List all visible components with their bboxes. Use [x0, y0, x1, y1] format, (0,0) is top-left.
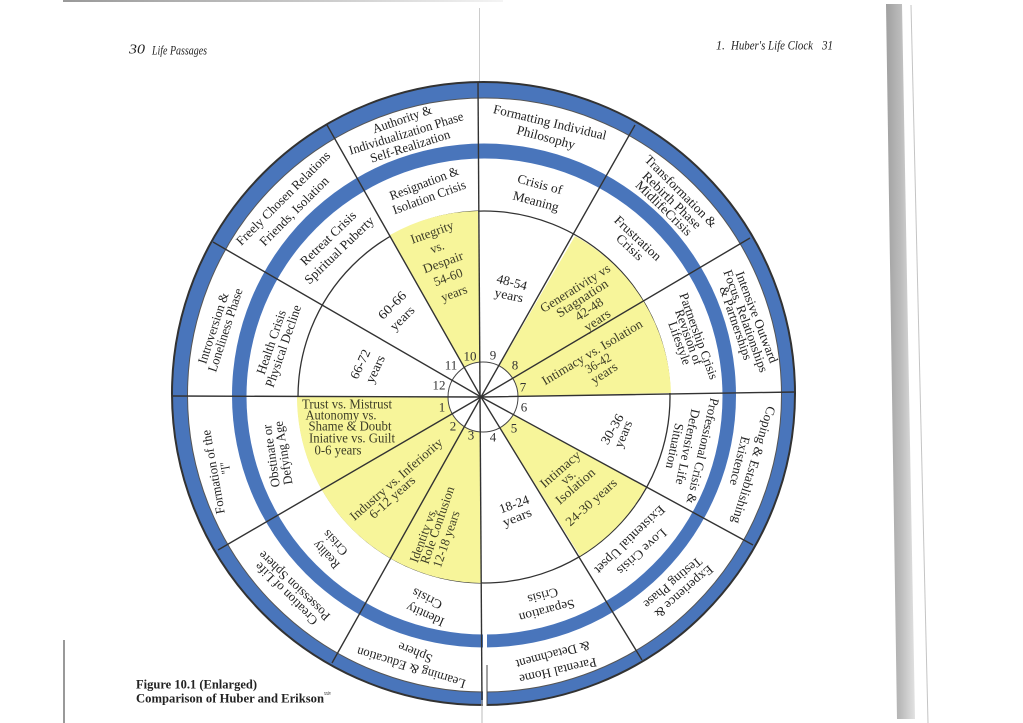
- Erikson label: Generativity vs Stagnation: Generativity vs: [537, 260, 613, 316]
- age label: 48-54 years: [493, 271, 529, 305]
- middle ring label: Professional Crisis: [663, 397, 722, 505]
- outer ring label: Introversion: Introversion &: [194, 290, 232, 366]
- middle ring label: Partnership Crisis: Revision of: [672, 307, 706, 367]
- age label: 18-24 years: 18-24: [497, 491, 532, 516]
- age label: 30-36 years: 30-36: [597, 411, 627, 447]
- age label: 30-36 years: [597, 411, 635, 450]
- middle ring label: Reality Crisis: Reality: [309, 537, 343, 572]
- Erikson label: Generativity vs Stagnation: Stagnation: [553, 275, 611, 320]
- middle ring label: Health Crisis: Physical Decline: [262, 303, 304, 389]
- sector numbers 1 to 12: 5: [511, 420, 517, 436]
- outer ring label: Experience and Testing: Testing Phase: [640, 554, 705, 612]
- Erikson label: Trust, Autonomy, Initiative 0-6 years: Shame & Doubt: [308, 420, 392, 434]
- book gutter line: [478, 8, 480, 82]
- yellow sector: Erikson stages 7 and 8: [481, 236, 671, 397]
- sector numbers 1 to 12: 10: [464, 348, 476, 364]
- middle ring label: Love Crisis: Love Crisis: [614, 526, 670, 578]
- Erikson label: Generativity vs Stagnation: 42-48: [572, 294, 606, 324]
- header: left page: Life Passages: [151, 42, 207, 58]
- middle ring label: Frustration Crisis: Crisis: [613, 231, 647, 263]
- middle ring label: Crisis of Meaning: [511, 171, 565, 214]
- outer ring label: Formatting Individual Philosophy: Philosophy: [515, 122, 577, 152]
- page edge: left scan line: [63, 640, 65, 723]
- chart: Huber and Erikson life clock wheel: [172, 82, 795, 705]
- age label: 66-72 years: [347, 347, 388, 385]
- Erikson label: Intimacy vs. Isolation 24-30: [537, 447, 620, 529]
- middle ring label: Separation Crisis: Separation: [517, 596, 576, 626]
- Erikson label: Integrity vs. Despair: Integrity: [408, 217, 456, 247]
- middle ring label: Professional Crisis: Situation: [663, 422, 687, 471]
- Erikson label: Industry vs. Inferiority: 6-12 years: [366, 472, 418, 522]
- figure caption: xxiv: [324, 691, 331, 697]
- Erikson label: Identity vs. Role Confusion: Role Confusion: [417, 484, 457, 566]
- middle ring label: Resignation: Isolation Crisis: [390, 177, 468, 217]
- Erikson label: Generativity vs Stagnation: years: [581, 306, 613, 334]
- figure caption: [136, 676, 331, 706]
- middle ring label: Identity Crisis: [403, 585, 446, 630]
- outer ring label: Transformation: Rebirth Phase: [639, 168, 705, 232]
- middle ring label: Frustration Crisis: Frustration: [611, 212, 665, 264]
- outer ring label: Creation of Life: Possession Sphere: [255, 548, 333, 624]
- middle ring label: Health Crisis: Health Crisis: [253, 308, 289, 376]
- Erikson label: Intimacy vs. Isolation 36-42: Intimacy vs. Isolation: [539, 316, 646, 388]
- middle ring label: Partnership Crisis: Partnership Crisis: [676, 291, 722, 381]
- outer white ring: Huber phases: [188, 98, 782, 692]
- age label: 60-66 years: years: [386, 302, 418, 334]
- age label: 48-54 years: 48-54: [495, 271, 529, 293]
- Erikson label: Trust, Autonomy, Initiative 0-6 years: [302, 398, 395, 458]
- sector numbers 1 to 12: 1: [439, 400, 445, 414]
- outer ring label: Learning and Education: Learning & Education: [354, 644, 467, 692]
- age label: 30-36 years: years: [611, 418, 635, 450]
- sector numbers 1 to 12: 3: [468, 428, 474, 442]
- header: right page: 31: [821, 38, 833, 52]
- middle ring label: Professional Crisis: Professional Crisis &: [684, 397, 722, 505]
- Erikson label: Integrity vs. Despair: 54-60: [431, 265, 465, 289]
- sector numbers 1 to 12: 7: [520, 380, 527, 394]
- outer ring label: Introversion: Loneliness Phase: [204, 286, 246, 374]
- middle white ring: crises: [246, 158, 722, 634]
- Erikson label: Intimacy vs. Isolation 36-42: years: [588, 359, 620, 387]
- age label: 18-24 years: years: [500, 504, 534, 530]
- page edge: thin right line: [911, 5, 928, 723]
- outer ring label: Freely Chosen Relations: Friends, Isolation: [256, 173, 332, 249]
- outer ring label: Intensive Outward: & Partnerships: [716, 284, 756, 362]
- middle ring label: Reality Crisis: Crisis: [319, 527, 351, 559]
- outer ring label: Authority: Individualization Phase: [347, 108, 465, 158]
- header: right page: 1.: [716, 38, 725, 52]
- outer ring label: Formatting Individual Philosophy: Formatting Individual: [492, 101, 609, 143]
- outer ring label: Creation of Life: Creation of Life: [251, 559, 321, 629]
- middle ring label: Reality Crisis: [309, 527, 351, 572]
- center hub circle: [448, 362, 518, 432]
- outer ring label: Intensive Outward: Intensive Outward: [733, 269, 782, 365]
- age label: 66-72 years: years: [362, 353, 388, 385]
- outer ring label: Formation of the I: Formation of the: [198, 429, 228, 515]
- outer ring label: Transformation: MidlifeCrisis: [633, 177, 695, 239]
- yellow sector: Erikson stage 5: [481, 397, 646, 556]
- outer ring label: Intensive Outward: Focus, Relationships: [720, 268, 772, 374]
- yellow sector: Erikson stage 10: [390, 211, 481, 397]
- Erikson label: Intimacy vs. Isolation 24-30: Intimacy: [537, 447, 584, 491]
- outer ring label: Learning and Education: Sphere: [395, 639, 434, 667]
- sector numbers 1 to 12: 4: [490, 430, 497, 444]
- middle ring label: Professional Crisis: Defensive Life: [673, 408, 703, 486]
- Erikson label: Industry vs. Inferiority: Industry vs. Inferiority: [347, 434, 446, 523]
- Erikson label: Integrity vs. Despair: vs.: [428, 238, 446, 256]
- Erikson label: Identity vs. Role Confusion: 12-18 years: [429, 509, 463, 569]
- outer blue ring: [172, 82, 795, 705]
- outer ring label: Experience and Testing: Experience &: [652, 562, 716, 622]
- header: left page: [128, 42, 207, 58]
- outer ring label: Transformation: Transformation &: [642, 152, 720, 230]
- Erikson label: Intimacy vs. Isolation 24-30: 24-30 years: [562, 475, 620, 529]
- age label: 60-66 years: 60-66: [375, 287, 410, 322]
- Erikson label: Trust, Autonomy, Initiative 0-6 years: Iniative vs. Guilt: [309, 432, 395, 446]
- Erikson label: Trust, Autonomy, Initiative 0-6 years: Trust vs. Mistrust: [302, 398, 392, 412]
- spokes dividing the twelve sectors: [172, 82, 795, 705]
- middle ring label: Identity Crisis: Crisis: [409, 585, 445, 613]
- middle ring label: Identity Crisis: Identity: [403, 600, 446, 630]
- Erikson label: Trust, Autonomy, Initiative 0-6 years: Autonomy vs.: [306, 408, 376, 424]
- age label: 66-72 years: 66-72: [347, 347, 373, 381]
- outer ring label: Parental Home: & Detachment: [514, 638, 592, 672]
- middle ring label: Resignation: Resignation &: [387, 163, 461, 203]
- outer ring label: Freely Chosen Relations: Freely Chosen Relations: [233, 148, 333, 248]
- Erikson label: Integrity vs. Despair: years: [439, 281, 469, 305]
- page edge: right binding shadow: [886, 4, 915, 719]
- middle ring label: Retreat Crisis: Retreat Crisis: [297, 208, 359, 268]
- outer ring label: Authority: Authority &: [370, 102, 434, 136]
- middle ring label: Separation Crisis: [517, 585, 576, 626]
- Erikson label: Identity vs. Role Confusion: [406, 484, 463, 569]
- middle ring label: Obstinate or Defying Age: Defying Age: [271, 420, 295, 486]
- middle ring label: Partnership Crisis: Lifestyle: [665, 319, 695, 367]
- Erikson label: Integrity vs. Despair: Despair: [421, 248, 466, 276]
- sector numbers 1 to 12: 6: [521, 400, 528, 414]
- sector numbers 1 to 12: 8: [512, 358, 518, 372]
- figure caption: Comparison of Huber and Erikson: [136, 690, 325, 706]
- header: left page: 30: [128, 42, 145, 58]
- header: right page: Huber's Life Clock: [730, 38, 813, 52]
- age label: 60-66 years: [375, 287, 418, 334]
- middle ring label: Love Crisis: Existential Upset: [591, 503, 668, 578]
- book gutter gap across lower rings: [482, 628, 487, 723]
- middle ring label: Crisis of Meaning: Meaning: [511, 188, 561, 214]
- Erikson label: Intimacy vs. Isolation 24-30: Isolation: [552, 464, 598, 507]
- sector numbers 1 to 12: 11: [445, 358, 457, 372]
- outer ring label: Coping and Establishing: Existence: [727, 435, 753, 487]
- Erikson label: Identity vs. Role Confusion: Identity vs.: [406, 506, 440, 564]
- Erikson label: Intimacy vs. Isolation 24-30: vs.: [557, 466, 579, 488]
- yellow sector: Erikson stages 1 to 3: [297, 396, 481, 583]
- outer ring label: Parental Home: Parental Home: [518, 655, 598, 687]
- age label: 48-54 years: years: [493, 285, 525, 305]
- inner age circle: [298, 211, 670, 583]
- middle ring label: Obstinate or Defying Age: [259, 420, 295, 488]
- Erikson label: Intimacy vs. Isolation 36-42: 36-42: [582, 350, 614, 376]
- outer ring label: Authority: Self-Realization: [368, 126, 452, 166]
- sector numbers 1 to 12: 9: [490, 348, 496, 362]
- outer ring label: Coping and Establishing: Coping & Establishing: [729, 404, 779, 526]
- figure caption: Figure 10.1 (Enlarged): [136, 676, 257, 692]
- outer ring label: Formation of the I: "I": [217, 461, 233, 475]
- middle ring label: Retreat Crisis: Spiritual Puberty: [301, 213, 377, 287]
- page edge: top scan shadow: [63, 0, 503, 2]
- sector numbers 1 to 12: [432, 348, 528, 444]
- middle ring label: Crisis of Meaning: Crisis of: [516, 171, 565, 197]
- middle ring label: Obstinate or Defying Age: Obstinate or: [259, 423, 283, 488]
- middle ring label: Separation Crisis: Crisis: [526, 585, 560, 607]
- outer ring label: Parental Home: [514, 638, 598, 687]
- Erikson label: Integrity vs. Despair: [408, 217, 469, 305]
- Erikson label: Trust, Autonomy, Initiative 0-6 years: 0-6 years: [314, 444, 362, 458]
- sector numbers 1 to 12: 12: [432, 378, 446, 392]
- inner blue ring: [232, 144, 736, 648]
- sector numbers 1 to 12: 2: [450, 418, 456, 434]
- age label: 18-24 years: [497, 491, 534, 530]
